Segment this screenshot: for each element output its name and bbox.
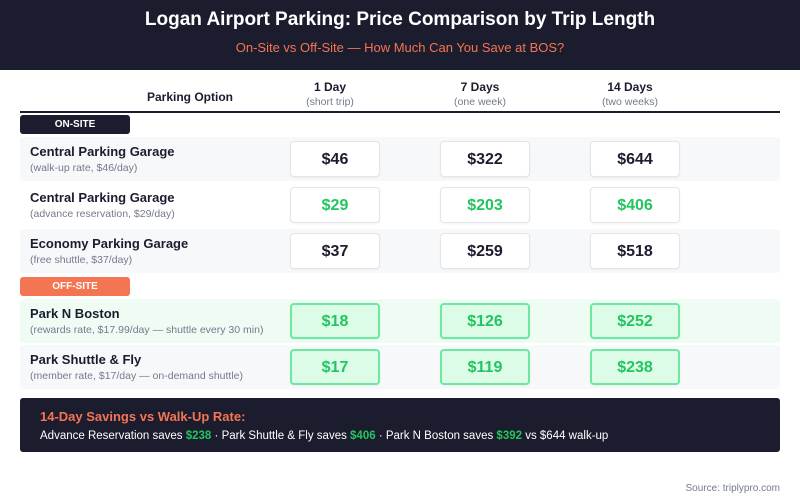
row: park n boston: $18 bbox=[322, 313, 348, 330]
badge: on-site: ON-SITE bbox=[55, 119, 95, 130]
row: economy: (free shuttle, $37/day) bbox=[30, 254, 132, 266]
column header: 1 day bbox=[306, 80, 354, 108]
savings callout bbox=[20, 398, 780, 452]
row: central walk-up: Central Parking Garage bbox=[30, 144, 174, 159]
column header: 7 days: (one week) bbox=[454, 96, 506, 108]
row: park shuttle & fly: $238 bbox=[617, 359, 653, 376]
row: economy: $518 bbox=[617, 243, 653, 260]
row: central walk-up bbox=[20, 137, 780, 181]
row: economy: Economy Parking Garage bbox=[30, 236, 188, 251]
header bbox=[0, 0, 800, 70]
row: central walk-up: $322 bbox=[467, 151, 503, 168]
source: Source: triplypro.com bbox=[686, 483, 780, 494]
row: park shuttle & fly: (member rate, $17/day — on-demand shuttle) bbox=[30, 370, 243, 382]
row: park shuttle & fly bbox=[20, 345, 780, 389]
row: park shuttle & fly: Park Shuttle & Fly bbox=[30, 352, 141, 367]
row: economy bbox=[20, 229, 780, 273]
row: park shuttle & fly: $17 bbox=[322, 359, 348, 376]
row: park n boston: (rewards rate, $17.99/day — shuttle every 30 min) bbox=[30, 324, 263, 336]
column header: 7 days: 7 Days bbox=[461, 80, 499, 94]
column header: 14 days bbox=[602, 80, 658, 108]
savings callout: 14-Day Savings vs Walk-Up Rate: bbox=[40, 409, 245, 424]
row: central walk-up: $46 bbox=[322, 151, 348, 168]
row: park n boston: Park N Boston bbox=[30, 306, 120, 321]
row: park shuttle & fly: $119 bbox=[468, 359, 502, 376]
row: central advance: Central Parking Garage bbox=[30, 190, 174, 205]
row: park n boston bbox=[20, 299, 780, 343]
subtitle: On-Site vs Off-Site — How Much Can You Save at BOS? bbox=[236, 40, 564, 55]
badge: off-site bbox=[20, 277, 130, 296]
badge: on-site bbox=[20, 115, 130, 134]
row: central advance: $406 bbox=[617, 197, 653, 214]
column header: 1 day: 1 Day bbox=[314, 80, 346, 94]
column header: 1 day: (short trip) bbox=[306, 96, 354, 108]
row: park n boston: $252 bbox=[617, 313, 653, 330]
savings callout: Advance Reservation saves $238 · Park Shuttle & Fly saves $406 · Park N Boston saves $392 vs $644 walk-up bbox=[40, 430, 608, 442]
badge: off-site: OFF-SITE bbox=[52, 281, 98, 292]
row: central advance: $29 bbox=[322, 197, 348, 214]
row: central advance bbox=[20, 183, 780, 227]
row: economy: $37 bbox=[322, 243, 348, 260]
column header: parking option: Parking Option bbox=[147, 90, 233, 104]
row: economy: $259 bbox=[467, 243, 503, 260]
row: park n boston: $126 bbox=[467, 313, 503, 330]
row: central advance: (advance reservation, $29/day) bbox=[30, 208, 175, 220]
title: Logan Airport Parking: Price Comparison by Trip Length bbox=[145, 9, 655, 30]
column header: 14 days: 14 Days bbox=[607, 80, 653, 94]
column header: 14 days: (two weeks) bbox=[602, 96, 658, 108]
column header: 7 days bbox=[454, 80, 506, 108]
row: central advance: $203 bbox=[467, 197, 503, 214]
row: central walk-up: (walk-up rate, $46/day) bbox=[30, 162, 137, 174]
row: central walk-up: $644 bbox=[617, 151, 653, 168]
